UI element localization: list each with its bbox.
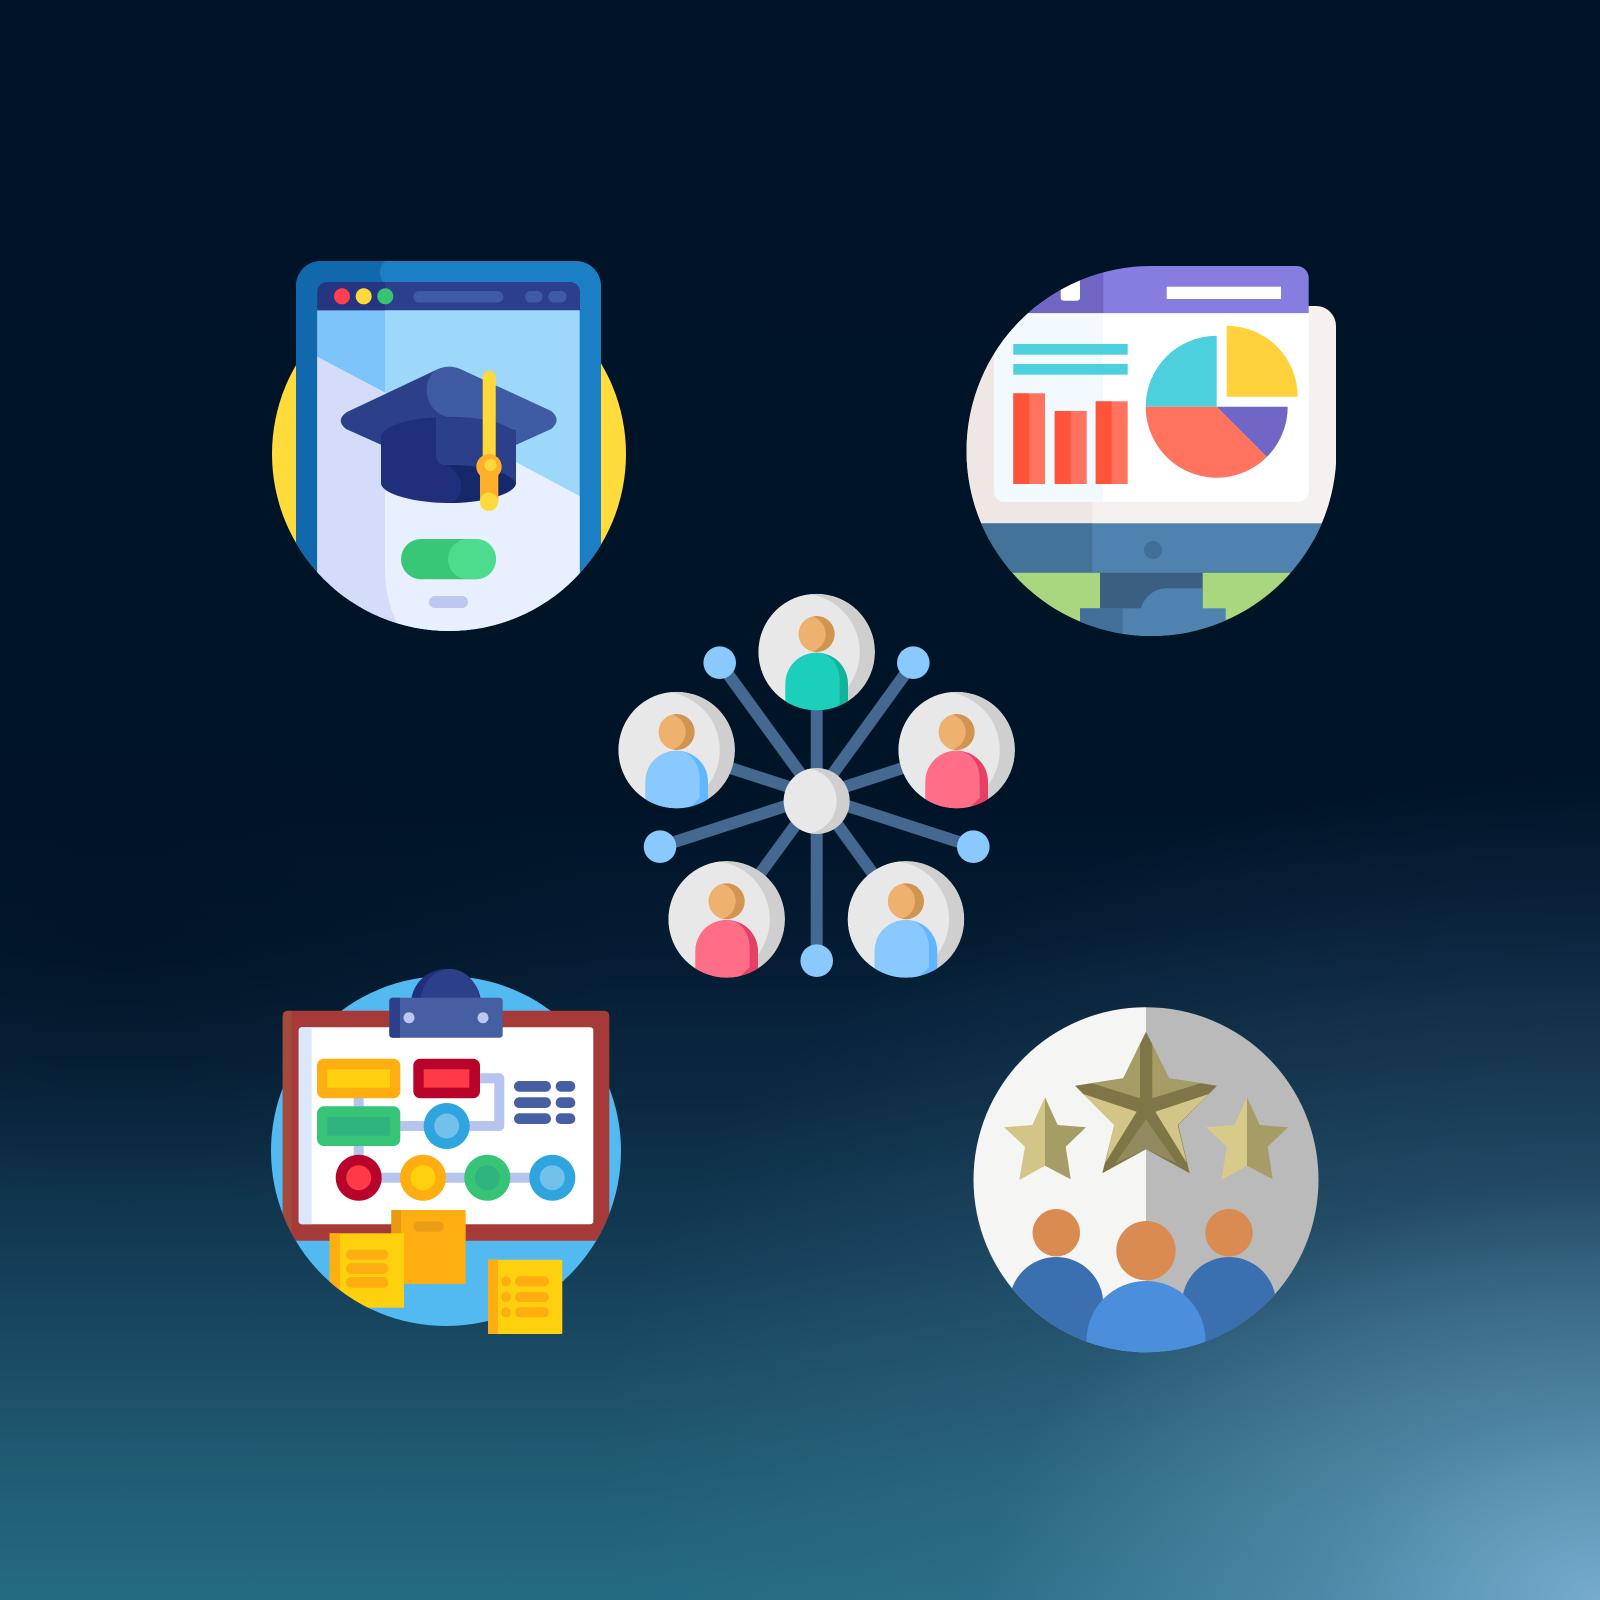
list lines <box>514 1081 575 1124</box>
desk background <box>1012 572 1291 636</box>
tablet frame <box>296 261 601 631</box>
clipboard clip <box>389 998 503 1038</box>
icon: monitor with charts <box>960 260 1340 644</box>
pie chart <box>1146 326 1298 478</box>
person: bottom left pink <box>668 861 785 981</box>
person: top teal <box>758 594 875 714</box>
monitor bezel <box>960 306 1336 540</box>
bar chart <box>1013 393 1128 484</box>
tassel <box>476 371 502 511</box>
central hub <box>784 768 850 834</box>
icon: star ratings and people <box>974 1007 1318 1352</box>
tablet screen <box>317 310 580 640</box>
people group <box>1012 1209 1275 1352</box>
home button <box>429 596 468 608</box>
browser header bar <box>317 282 580 310</box>
sticky note: yellow left <box>330 1233 404 1308</box>
small star left <box>1004 1097 1086 1180</box>
flow connectors <box>359 1078 552 1178</box>
end dots <box>644 646 990 977</box>
person: bottom right blue <box>848 861 964 981</box>
board paper <box>299 1027 593 1224</box>
flow box: red <box>413 1059 480 1098</box>
clip hump <box>411 969 481 1039</box>
board frame <box>283 1011 609 1241</box>
connector spokes <box>660 652 973 961</box>
window content <box>994 313 1309 502</box>
monitor base panel <box>960 523 1340 573</box>
window title bar <box>1028 266 1309 314</box>
monitor stand <box>1080 572 1226 636</box>
large star <box>1075 1032 1217 1173</box>
badge circle <box>970 1005 1322 1355</box>
toggle switch <box>401 539 496 579</box>
person: left blue <box>618 692 735 812</box>
flow node: blue <box>424 1103 470 1149</box>
small star right <box>1206 1097 1288 1180</box>
graduation cap <box>341 367 556 503</box>
icon: clipboard flowchart <box>271 969 621 1334</box>
icon: online graduation tablet <box>272 261 626 631</box>
flow nodes row <box>336 1155 575 1201</box>
flow box: orange <box>317 1059 400 1098</box>
sticky note: orange <box>391 1210 466 1284</box>
text lines <box>1013 344 1128 375</box>
person: right pink <box>898 692 1015 812</box>
flow box: green <box>317 1106 400 1146</box>
infographic icons <box>271 261 1336 1352</box>
icon: network of people <box>618 594 1015 981</box>
sticky note: yellow right <box>488 1260 562 1334</box>
